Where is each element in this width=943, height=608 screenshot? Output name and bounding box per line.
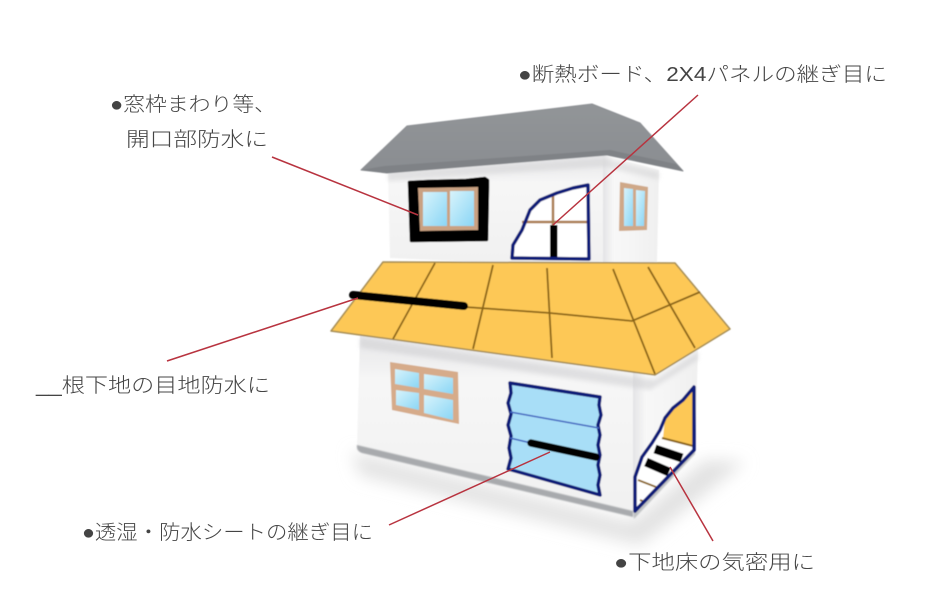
breathable waterproof sheet cutaway [508, 383, 601, 495]
upper grey roof [361, 104, 683, 173]
floor cutaway with tape [635, 387, 694, 511]
label: subfloor airtightness: ●下地床の気密用に [614, 551, 815, 574]
house illustration [331, 104, 730, 519]
black tape on sheet seam [531, 443, 596, 457]
label: roof substrate joints: __根下地の目地防水に [35, 374, 270, 397]
label: breathable waterproof sheet seams: ●透湿・防水シートの継ぎ目に [82, 521, 373, 544]
label: window frame opening waterproofing [110, 93, 276, 151]
lower window [390, 362, 459, 424]
leader line: opening [272, 157, 418, 215]
upper storey walls [388, 155, 659, 268]
leader line: insulation board [553, 95, 698, 225]
label: insulation board and 2x4 panel seams: ●断熱ボード、2X4パネルの継ぎ目に [518, 63, 887, 86]
label: window frame opening waterproofing: 開口部防水に [126, 128, 268, 151]
lower yellow roof with panel seams [331, 262, 730, 375]
leader line: floor [670, 467, 713, 541]
side window [619, 182, 648, 231]
lower storey walls [357, 335, 698, 519]
window with black tape [409, 178, 488, 241]
black tape on roof seam [353, 295, 464, 306]
label: window frame opening waterproofing: ●窓枠まわり等、 [110, 93, 276, 116]
cutaway panel with board seams [512, 185, 589, 259]
ground shadow [352, 452, 745, 545]
leader line: roof [167, 298, 358, 361]
leader line: sheet [389, 452, 550, 525]
